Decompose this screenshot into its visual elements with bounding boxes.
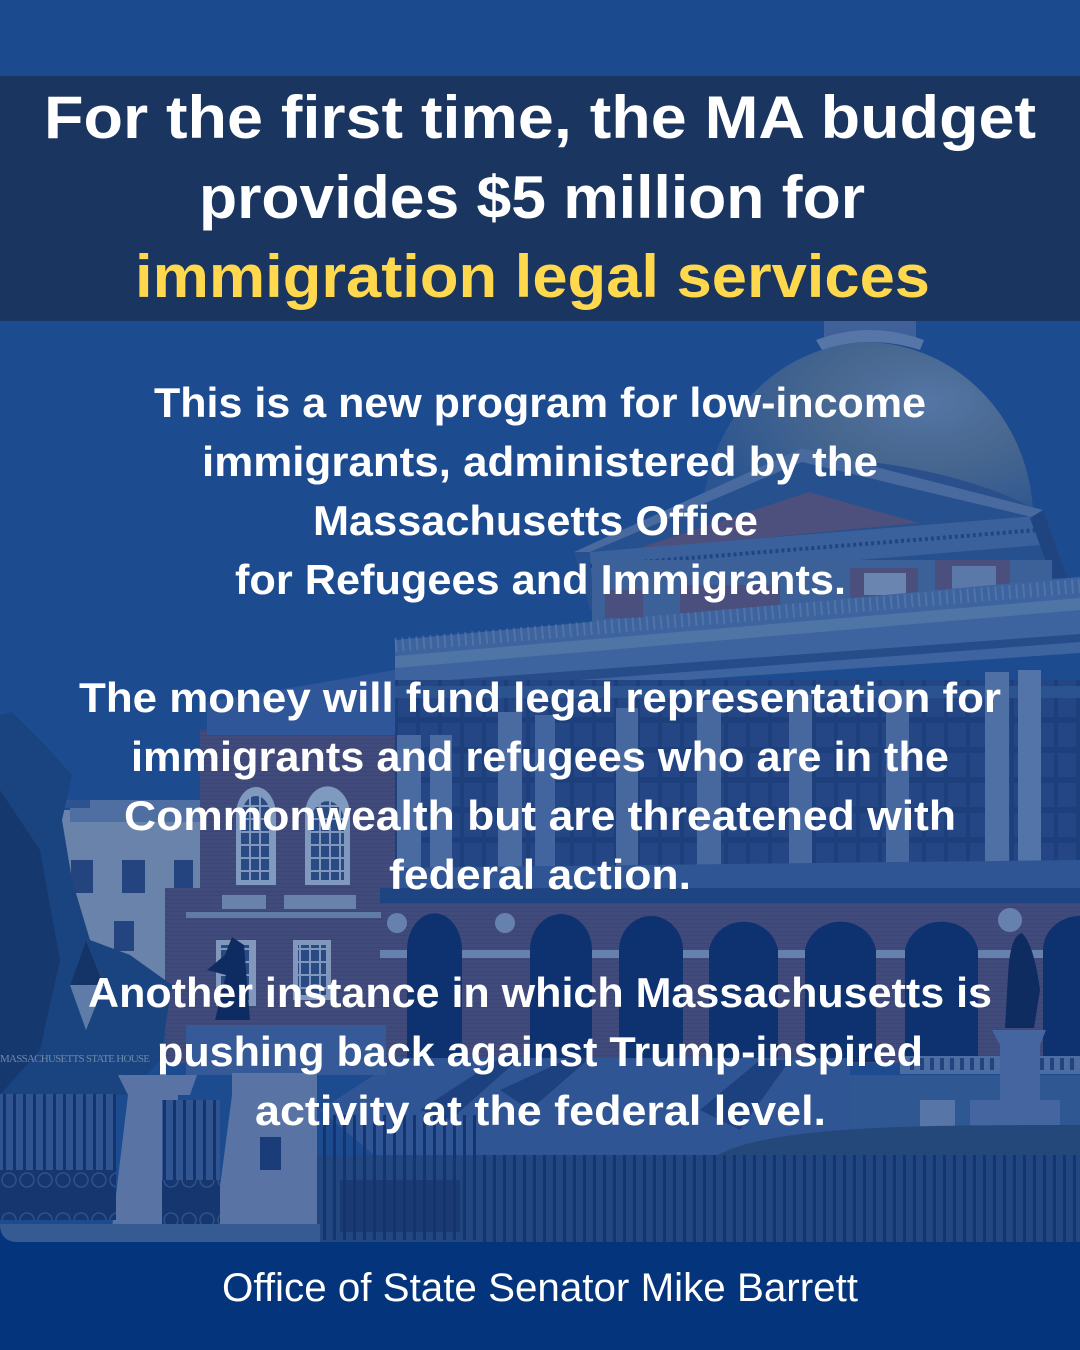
hedge [718, 1125, 1080, 1155]
body paragraph 3: Another instance in which Massachusetts is [88, 969, 992, 1016]
state house sign: MASSACHUSETTS STATE HOUSE [0, 1053, 150, 1065]
body paragraph 1: immigrants, administered by the [202, 438, 878, 485]
dome and cupola [705, 321, 1033, 507]
tree [0, 712, 172, 1095]
gate pillars [112, 1073, 317, 1240]
left wing building [52, 800, 205, 980]
title text [44, 84, 1036, 310]
title banner [0, 76, 1080, 321]
body paragraph 1: Massachusetts Office [313, 497, 758, 544]
terrace, stairs and balustrade [186, 1025, 1080, 1160]
body paragraph 3 [88, 969, 992, 1134]
body paragraph 3: pushing back against Trump-inspired [157, 1028, 923, 1075]
pavement strip [0, 1224, 320, 1242]
iron fences and gates [0, 1094, 1080, 1242]
balustrade and entablature [394, 577, 1080, 680]
body paragraph 1 [154, 379, 926, 603]
footer bar [0, 1242, 1080, 1350]
body paragraph 2: The money will fund legal representation for [79, 674, 1001, 721]
arched windows on left wing [216, 786, 356, 1006]
body paragraph 1: for Refugees and Immigrants. [235, 556, 846, 603]
body paragraph 2: immigrants and refugees who are in the [131, 733, 949, 780]
statue on left steps [207, 937, 250, 1020]
title text: provides $5 million for [199, 164, 865, 231]
attic storey with brick panels [592, 560, 1052, 622]
brick facade with arches [165, 670, 1080, 1063]
statue of Daniel Webster and pedestal [970, 933, 1060, 1140]
body paragraph 2 [79, 674, 1001, 898]
title text: immigration legal services [135, 243, 930, 310]
title text: For the first time, the MA budget [44, 84, 1036, 151]
footer credit: Office of State Senator Mike Barrett [222, 1266, 858, 1310]
body paragraph 3: activity at the federal level. [255, 1087, 826, 1134]
pediment [574, 448, 1067, 610]
background photo: Massachusetts State House, blue-tinted [0, 321, 1080, 1242]
portico with columns [380, 670, 1080, 892]
body paragraph 2: Commonwealth but are threatened with [124, 792, 956, 839]
body paragraph 1: This is a new program for low-income [154, 379, 926, 426]
lamp post [70, 940, 104, 1030]
body paragraph 2: federal action. [389, 851, 691, 898]
top band [0, 0, 1080, 76]
